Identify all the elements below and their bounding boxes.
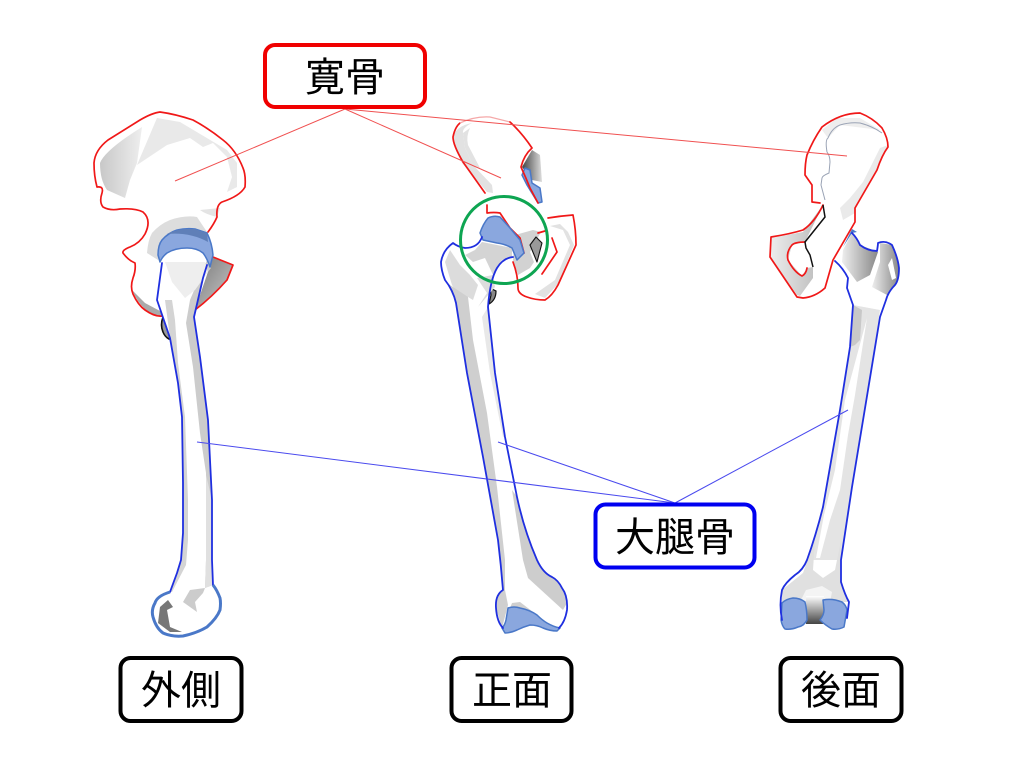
front femur [441, 216, 567, 633]
blue condyle right [820, 599, 847, 629]
back hip bone [770, 113, 888, 298]
label: lateral: 外側 [141, 669, 221, 713]
lateral femur [152, 229, 220, 636]
back femur [780, 229, 899, 629]
blue joint surface [158, 229, 213, 267]
label: hip bone [265, 45, 425, 107]
label: femur [596, 504, 754, 568]
label: hip bone: 寛骨 [305, 56, 385, 100]
blue head of femur [480, 216, 524, 260]
green circle [460, 196, 548, 284]
label: front [452, 658, 572, 721]
black bump [162, 317, 170, 339]
blue condyle left [781, 598, 807, 629]
label: back: 後面 [801, 669, 881, 713]
label: femur: 大腿骨 [615, 516, 735, 560]
blue lower joint surface [502, 607, 560, 633]
leader lines: femur [197, 410, 848, 503]
figure: lateral view of hip bone and femur [94, 112, 245, 636]
label: lateral [120, 658, 242, 721]
label: back [780, 658, 902, 721]
black crack line [805, 205, 825, 267]
leader lines: hip bone [175, 109, 847, 181]
lateral hip bone [94, 112, 245, 316]
black sliver [489, 288, 496, 304]
front hip bone [453, 117, 576, 300]
figure: back view of hip bone and femur [770, 113, 899, 629]
inner pale contour [821, 123, 882, 200]
blue condyle edge [152, 585, 220, 636]
figure: front view of hip bone and femur [441, 117, 576, 633]
black sliver [530, 237, 542, 262]
label: front: 正面 [472, 669, 552, 713]
